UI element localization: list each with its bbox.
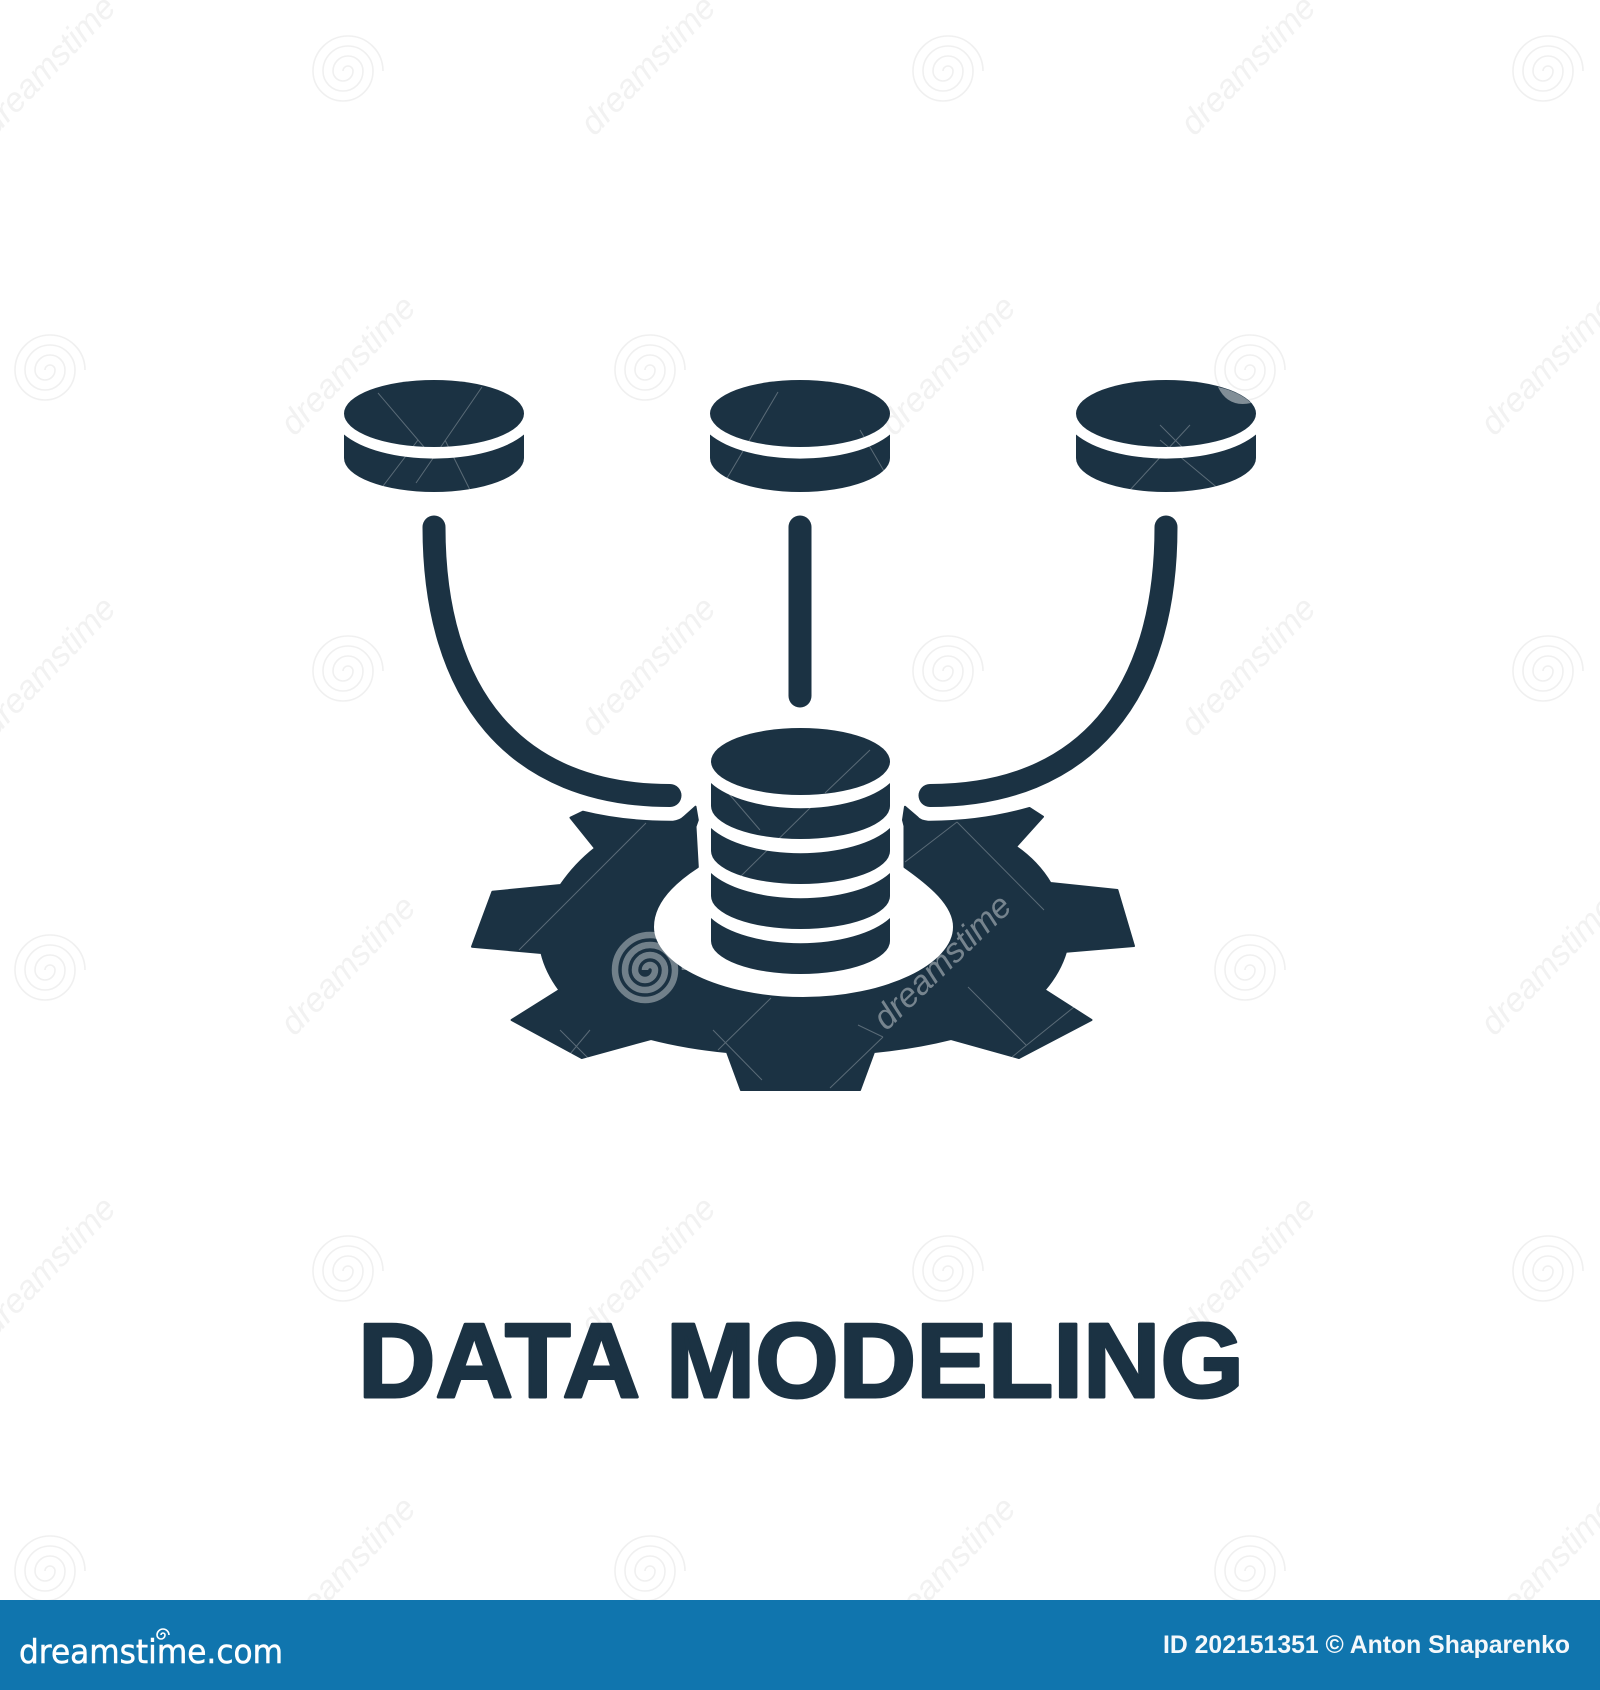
- footer logo wordmark: dreamstime.com: [19, 1632, 283, 1671]
- icon: gear: [472, 807, 1134, 1090]
- background watermark wordmarks: dreamstime: [873, 1489, 1023, 1643]
- background watermark wordmarks: dreamstime: [1173, 1189, 1323, 1343]
- watermark highlight on right disc: [1218, 387, 1251, 404]
- background watermark wordmarks: dreamstime: [273, 288, 423, 442]
- background watermark wordmarks: dreamstime: [873, 288, 1023, 442]
- icon: middle source database disc: [710, 380, 890, 492]
- icon: central database stack: [711, 728, 890, 974]
- watermark hairlines over the icon: [378, 387, 1220, 1088]
- connector: left curved line: [434, 527, 670, 796]
- connector: middle straight line: [788, 527, 812, 696]
- footer credit text: ID 202151351 © Anton Shaparenko: [1163, 1631, 1570, 1659]
- background watermark wordmarks: dreamstime: [573, 1189, 723, 1343]
- watermark spiral on gear: [615, 935, 685, 1000]
- title: DATA MODELING: [358, 1302, 1244, 1420]
- icon: data modeling: [344, 380, 1256, 1090]
- background watermark wordmarks: dreamstime: [273, 1489, 423, 1643]
- watermark wordmark on gear: dreamstime: [865, 887, 1019, 1037]
- background watermark wordmarks: dreamstime: [273, 888, 423, 1042]
- icon: left source database disc: [344, 380, 524, 492]
- footer bar: [0, 1600, 1600, 1690]
- footer logo spiral: [157, 1629, 169, 1639]
- background watermark wordmarks: dreamstime: [573, 589, 723, 743]
- connector: right curved line: [930, 527, 1166, 796]
- icon: right source database disc: [1076, 380, 1256, 492]
- background watermark wordmarks: dreamstime: [1173, 589, 1323, 743]
